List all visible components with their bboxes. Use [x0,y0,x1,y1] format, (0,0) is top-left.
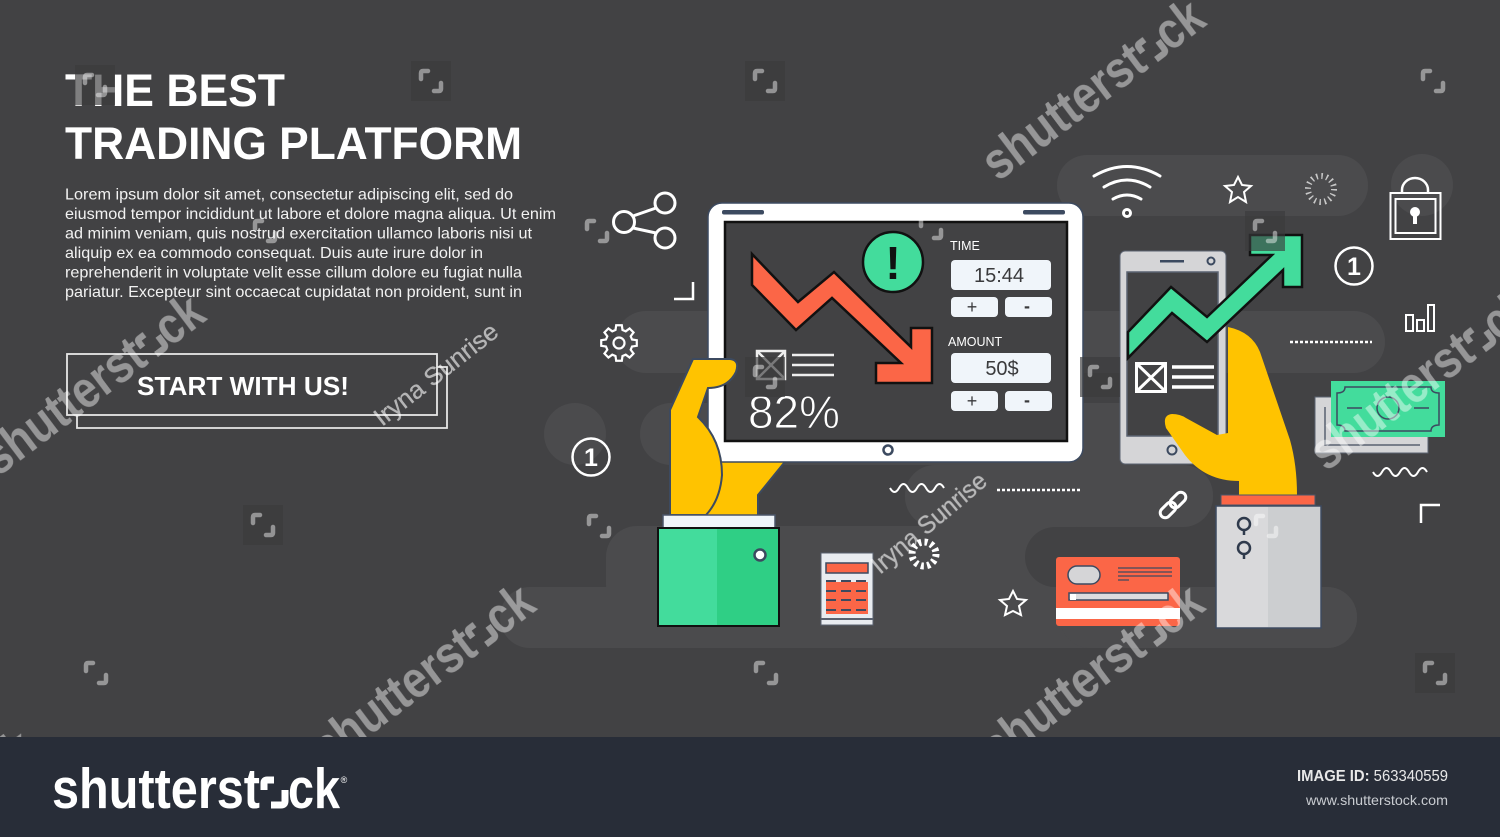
background pill lower right [1060,587,1357,648]
left hand thumb [670,359,737,515]
author watermarks: Iryna Sunrise [866,467,993,580]
icon: burst bottom [912,542,936,566]
title: TRADING PLATFORM [65,118,522,169]
footer image id: IMAGE ID: 563340559 [1297,768,1448,785]
body text: eiusmod tempor incididunt ut labore et dolore magna aliqua. Ut enim [65,206,556,223]
icon: corner bracket [674,282,693,299]
right hand [1165,327,1297,495]
icon: link [1158,490,1188,520]
time control [950,239,1052,317]
amount control: AMOUNT [948,335,1003,349]
background notch [1025,527,1300,587]
dotted line center [997,489,1080,491]
icon: gear [601,325,637,361]
icon: number one right: 1 [1347,253,1361,281]
image placeholder [757,351,834,379]
icon: padlock [1390,178,1440,239]
shutterstock watermarks: ck [472,572,545,647]
shutterstock watermarks: shutterst [970,31,1157,192]
image placeholder [1136,363,1214,392]
amount control: 50$ [985,358,1019,380]
icon: number one left [572,438,610,476]
down arrow [752,254,932,383]
icon: star bottom [1000,591,1026,615]
left cuff [663,515,775,529]
footer logo: ck [288,757,340,821]
credit card [1056,557,1180,626]
amount control [948,335,1052,411]
tablet [708,203,1083,462]
icon: star top [1225,177,1251,202]
shutterstock watermarks: shutterst [969,616,1156,777]
time control: 15:44 [974,265,1024,287]
watermark marks [75,61,1455,693]
button [67,354,447,428]
body text: ad minim veniam, quis nostrud exercitation ullamco laboris nisi ut [65,226,533,242]
left sleeve [658,528,779,626]
phone [1120,251,1226,464]
body text: pariatur. Excepteur sint occaecat cupidatat non proident, sunt in [65,284,522,301]
body text: aliquip ex ea commodo consequat. Duis aute irure dolor in [65,245,483,262]
footer url: www.shutterstock.com [1305,792,1448,808]
percentage: 82% [748,386,840,438]
footer logo: ® [341,775,348,785]
time control: TIME [950,239,980,253]
author watermarks: Iryna Sunrise [368,317,504,432]
left hand fingers [700,458,788,516]
shutterstock watermarks: ck [142,282,215,357]
footer logo: shutterst [52,757,260,821]
dotted line right [1290,341,1372,343]
amount control: + [967,391,977,411]
title: THE BEST [65,65,285,116]
icon: bars [1406,305,1434,331]
author watermarks [368,317,993,580]
money [1315,381,1445,453]
shutterstock watermarks: ck [1141,572,1214,647]
icon: number one right [1336,248,1372,284]
time control: + [967,297,977,317]
up arrow [1128,235,1302,358]
wave center [890,484,944,492]
alert badge [863,232,923,292]
right sleeve [1216,506,1321,628]
icon: burst top [1308,176,1334,202]
background pills [500,154,1453,648]
icon: wifi [1094,166,1160,216]
body text [65,186,556,301]
icon: share [614,193,675,248]
title [65,65,522,169]
icon: number one left: 1 [584,444,598,472]
icon: calculator [821,553,873,625]
footer bar [0,737,1500,837]
wave right [1373,468,1427,476]
amount control: - [1024,390,1030,410]
right cuff [1221,495,1315,505]
time control: - [1024,296,1030,316]
body text: Lorem ipsum dolor sit amet, consectetur adipiscing elit, sed do [65,186,513,204]
button: START WITH US! [137,371,349,401]
body text: reprehenderit in voluptate velit esse cillum dolore eu fugiat nulla [65,264,522,282]
shutterstock watermarks: shutterst [300,616,487,777]
icon: corner bracket right [1421,505,1440,523]
alert badge: ! [885,237,901,289]
